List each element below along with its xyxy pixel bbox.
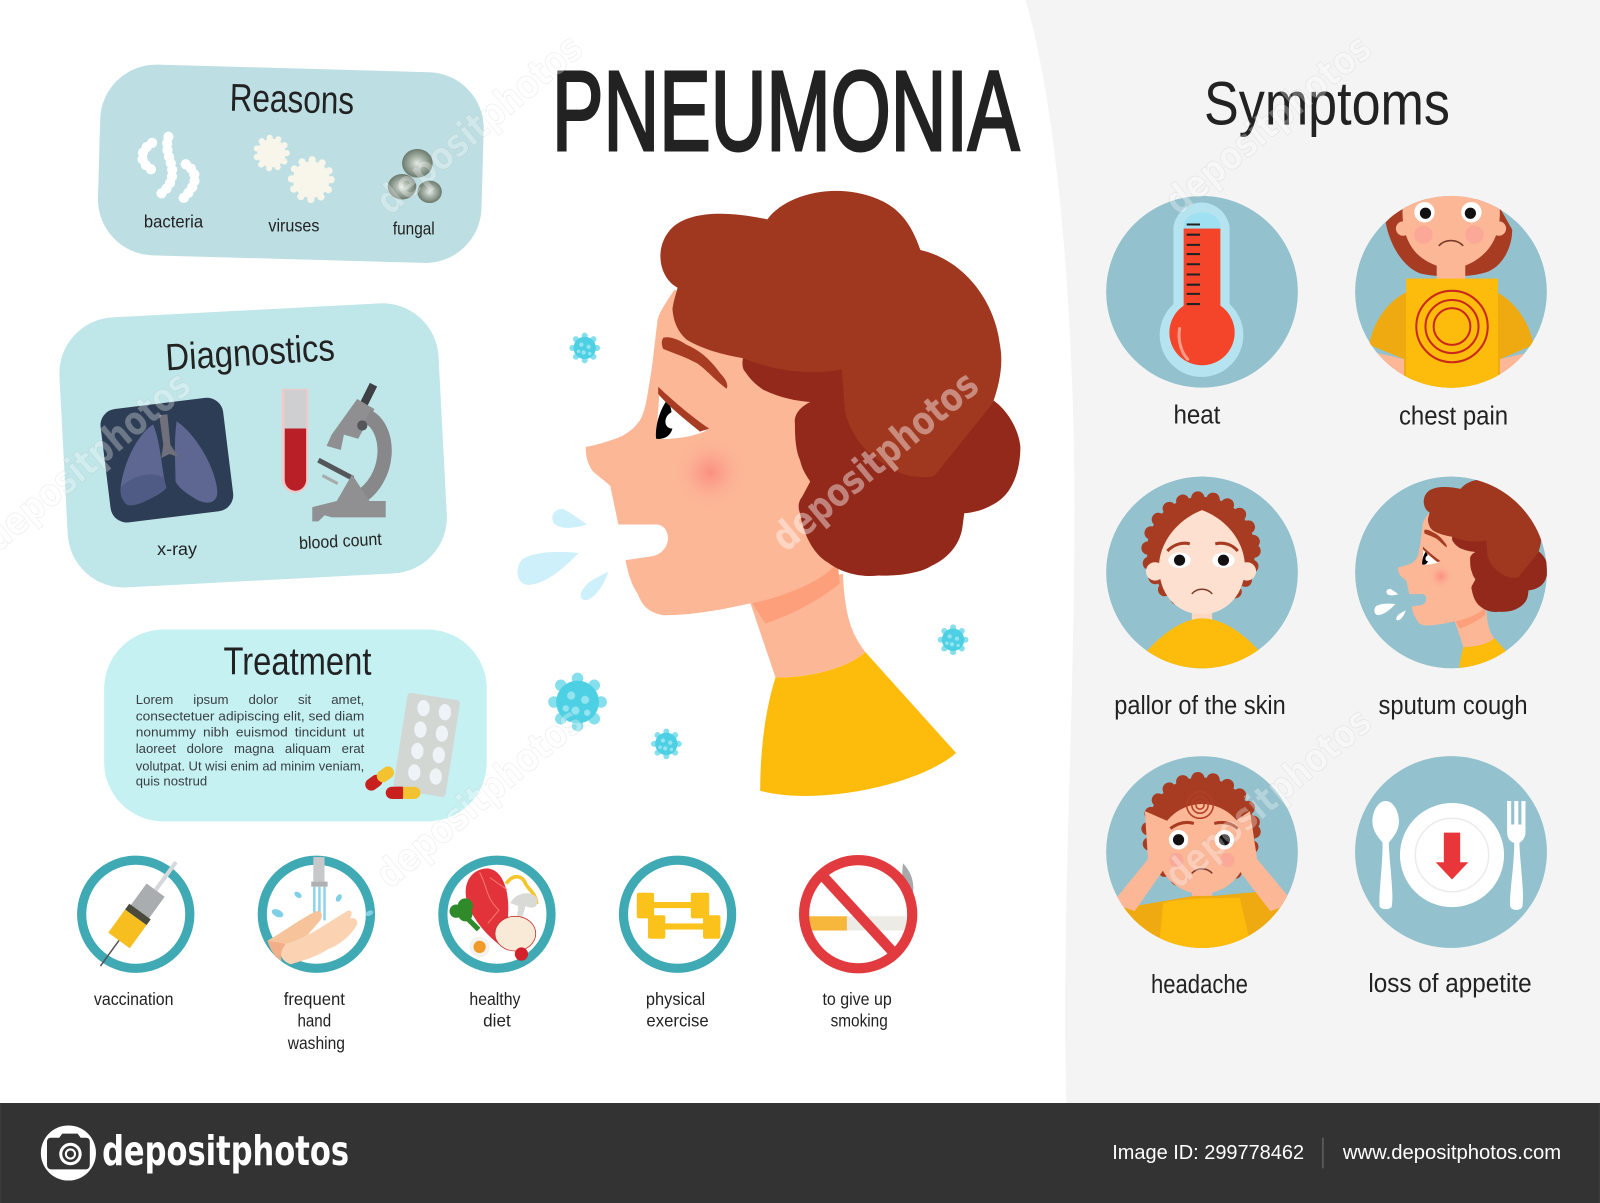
panel: reasons xyxy=(96,63,485,264)
icon: chest pain figure xyxy=(1355,194,1547,393)
symptom: chest pain xyxy=(1355,194,1547,430)
watermark text: depositphotos xyxy=(1156,699,1380,897)
symptom: heat xyxy=(1106,196,1298,429)
label: chest pain xyxy=(1399,402,1508,430)
label: sputum cough xyxy=(1379,692,1528,720)
label: to give up xyxy=(822,989,892,1009)
panel: symptoms background xyxy=(1025,0,1600,1103)
label: healthy xyxy=(469,989,521,1009)
label: vaccination xyxy=(94,989,174,1009)
text block: lorem ipsum: Lorem ipsum dolor sit amet, xyxy=(136,692,364,707)
label: viruses: viruses xyxy=(268,216,320,236)
text block: lorem ipsum: nonummy nibh euismod tincidunt ut xyxy=(136,725,365,740)
icon: fungal xyxy=(388,149,442,203)
hair: forelock shadow xyxy=(742,358,847,418)
heading: symptoms: Symptoms xyxy=(1204,69,1450,137)
label: exercise xyxy=(646,1010,709,1030)
symptom: loss of appetite xyxy=(1355,756,1547,998)
illustration: woman coughing, profile xyxy=(586,191,1020,796)
label: physical xyxy=(646,989,705,1009)
watermark text: depositphotos xyxy=(367,699,592,897)
label: bacteria: bacteria xyxy=(144,212,203,232)
label: blood count: blood count xyxy=(299,529,382,553)
label: smoking xyxy=(831,1010,888,1030)
eyebrow xyxy=(662,337,727,389)
heading: reasons: Reasons xyxy=(229,77,355,123)
label: diet xyxy=(483,1010,511,1030)
label: loss of appetite xyxy=(1368,970,1532,998)
icon: thermometer xyxy=(1106,196,1298,388)
prevention: give up smoking xyxy=(804,860,913,1030)
label: washing xyxy=(287,1033,345,1053)
label: fungal: fungal xyxy=(393,219,435,239)
watermark text: depositphotos xyxy=(763,362,988,561)
droplets xyxy=(517,509,608,600)
icon: microscope xyxy=(312,385,386,521)
image id: Image ID: 299778462 xyxy=(1112,1142,1304,1164)
label xyxy=(646,989,709,1030)
hair: bun xyxy=(795,400,1020,576)
label: frequent xyxy=(284,989,345,1009)
label: pallor of the skin xyxy=(1114,692,1286,720)
hair: main xyxy=(660,191,1001,477)
text block: lorem ipsum xyxy=(136,692,365,789)
icon: woman holding head xyxy=(1106,756,1301,964)
prevention: physical exercise xyxy=(623,860,732,1030)
face xyxy=(586,290,867,615)
icon: no smoking xyxy=(804,860,913,968)
eye xyxy=(656,387,709,439)
icon: x-ray film xyxy=(99,396,235,524)
logo text: depositphotos xyxy=(102,1127,349,1175)
label: hand xyxy=(297,1010,331,1030)
label xyxy=(284,989,345,1053)
label: heat xyxy=(1173,401,1220,429)
icon: coughing profile xyxy=(1355,477,1548,688)
cheek blush xyxy=(673,436,747,509)
website: www.depositphotos.com xyxy=(1342,1142,1561,1164)
symptom: headache xyxy=(1106,756,1301,999)
title: PNEUMONIA xyxy=(552,47,1020,174)
shirt xyxy=(760,652,956,796)
label: headache xyxy=(1151,971,1248,999)
symptom: pallor of the skin xyxy=(1106,477,1298,720)
icon: blister pack and capsules xyxy=(363,692,460,799)
icon: test tube xyxy=(282,389,308,493)
neck shadow xyxy=(752,563,840,623)
prevention: healthy diet xyxy=(443,860,551,1030)
panel: treatment xyxy=(104,630,487,821)
heading: diagnostics: Diagnostics xyxy=(164,326,336,378)
text block: lorem ipsum: quis nostrud xyxy=(136,774,207,789)
heading: treatment: Treatment xyxy=(223,640,372,683)
label xyxy=(469,989,521,1030)
prevention: hand washing xyxy=(262,857,374,1053)
icon: bacteria xyxy=(142,137,195,198)
text block: lorem ipsum: consectetuer adipiscing elit, sed diam xyxy=(136,708,364,723)
icon: dumbbells xyxy=(623,860,732,968)
watermark text xyxy=(0,26,1380,897)
prevention: vaccination xyxy=(82,854,190,1009)
label: x-ray: x-ray xyxy=(157,539,197,559)
panel: diagnostics xyxy=(57,300,450,590)
virus particles xyxy=(548,333,968,759)
icon: viruses xyxy=(256,138,331,199)
text block: lorem ipsum: laoreet dolore magna aliquam erat xyxy=(136,741,365,756)
text block: lorem ipsum: volutpat. Ut wisi enim ad minim veniam, xyxy=(136,758,364,773)
footer bar xyxy=(0,1103,1600,1203)
icon: pale face xyxy=(1106,476,1298,668)
icon: syringe xyxy=(82,854,190,974)
icon: food xyxy=(443,860,551,968)
label xyxy=(822,989,892,1030)
symptom: sputum cough xyxy=(1355,477,1548,720)
icon: hands under tap xyxy=(262,857,374,968)
neck xyxy=(750,573,865,678)
logo icon: camera xyxy=(41,1125,96,1181)
icon: plate, spoon, fork xyxy=(1355,756,1547,948)
